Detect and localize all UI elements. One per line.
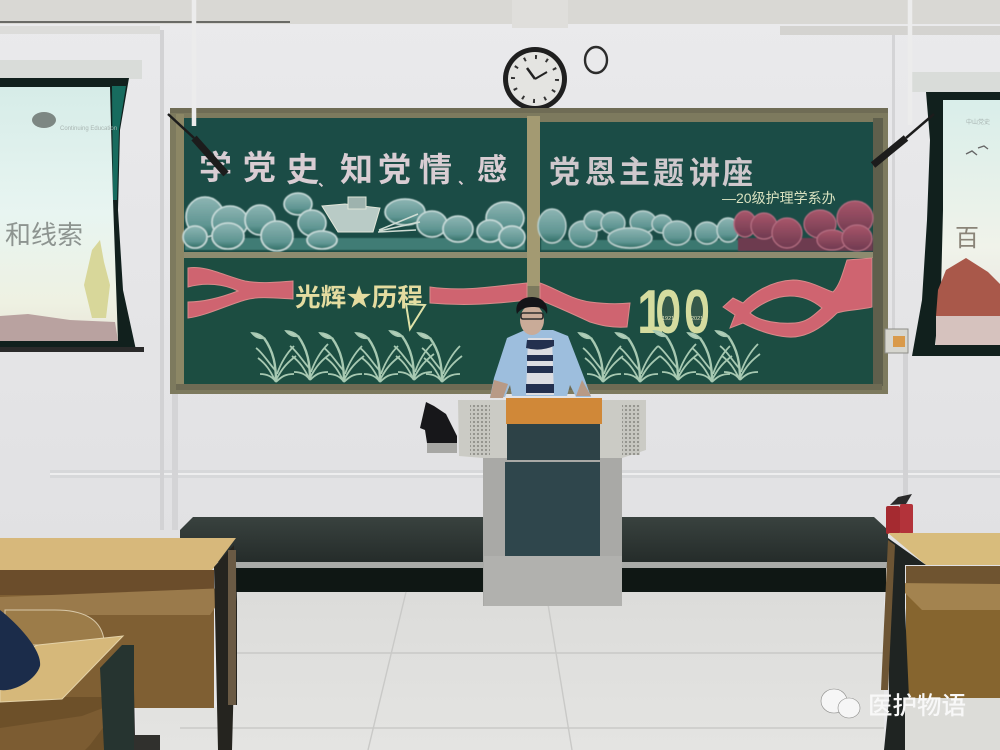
watermark label: 医护物语 bbox=[868, 692, 966, 720]
chair seat bbox=[0, 636, 123, 702]
right title: 题 bbox=[653, 156, 684, 191]
slogan arrow bbox=[406, 304, 425, 329]
left title: 知 bbox=[340, 151, 373, 188]
right title: 党 bbox=[549, 155, 580, 190]
left title: 党 bbox=[378, 151, 411, 188]
slide heading: 百 bbox=[955, 225, 979, 252]
background wall bbox=[0, 0, 1000, 600]
chalk clouds left bbox=[183, 193, 525, 251]
right title: 座 bbox=[722, 156, 753, 191]
left title bbox=[199, 149, 507, 189]
right desk bbox=[881, 533, 1000, 750]
left title: 史 bbox=[286, 151, 319, 188]
signature: —20级护理学系办 bbox=[722, 190, 836, 206]
number 100: 1921 bbox=[662, 316, 674, 322]
icon: wechat bbox=[821, 689, 860, 718]
floor bbox=[136, 592, 884, 750]
left projector screen: Continuing Education bbox=[60, 126, 117, 132]
face bbox=[520, 305, 544, 335]
jacket bbox=[490, 330, 591, 397]
pink clouds bbox=[734, 201, 873, 251]
right title bbox=[549, 155, 753, 191]
wheat right bbox=[579, 331, 760, 382]
black bag bbox=[420, 402, 457, 453]
right title: 讲 bbox=[689, 156, 720, 191]
left desk bbox=[0, 538, 237, 750]
glasses bbox=[521, 313, 543, 319]
slide heading: 和线索 bbox=[5, 220, 83, 250]
right projector screen: 中山党史 bbox=[966, 118, 990, 126]
chalk ship bbox=[322, 197, 420, 232]
wire loop bbox=[585, 47, 607, 73]
wall pipes bbox=[50, 30, 1000, 530]
chair back bbox=[5, 610, 104, 645]
chalk clouds right bbox=[538, 209, 746, 250]
wall clock bbox=[503, 47, 567, 111]
switch box bbox=[885, 329, 908, 353]
wheat left bbox=[252, 331, 462, 382]
slide logo bbox=[32, 112, 56, 128]
left title: 学 bbox=[199, 149, 232, 186]
slide building bbox=[936, 258, 1000, 316]
left title: 情 bbox=[419, 151, 452, 188]
hair bbox=[516, 297, 547, 314]
speaker bbox=[490, 297, 591, 398]
fire extinguishers bbox=[886, 494, 913, 534]
number 100: 100 bbox=[637, 276, 710, 347]
right title: 主 bbox=[619, 155, 650, 190]
left title: 、 bbox=[458, 171, 472, 187]
number 100: 2021 bbox=[691, 316, 703, 322]
striped shirt bbox=[526, 338, 554, 395]
slide figure bbox=[84, 240, 110, 318]
right projector screen bbox=[912, 72, 1000, 356]
left title: 党 bbox=[243, 149, 276, 186]
stage bbox=[180, 517, 888, 592]
ribbons bbox=[188, 258, 872, 337]
hands bbox=[490, 380, 591, 398]
left title: 、 bbox=[318, 173, 332, 189]
right title: 恩 bbox=[585, 155, 616, 190]
left title: 感 bbox=[477, 154, 507, 187]
blue bag bbox=[0, 610, 40, 690]
watermark bbox=[821, 689, 966, 720]
microphones bbox=[168, 114, 934, 174]
board ledge bbox=[184, 252, 873, 258]
hanging cables bbox=[194, 0, 910, 126]
blackboard bbox=[170, 108, 888, 394]
lectern bbox=[458, 398, 646, 606]
chalk slogan: 光辉★历程 bbox=[295, 284, 423, 312]
ceiling bbox=[0, 0, 1000, 35]
left projector screen bbox=[0, 60, 144, 352]
